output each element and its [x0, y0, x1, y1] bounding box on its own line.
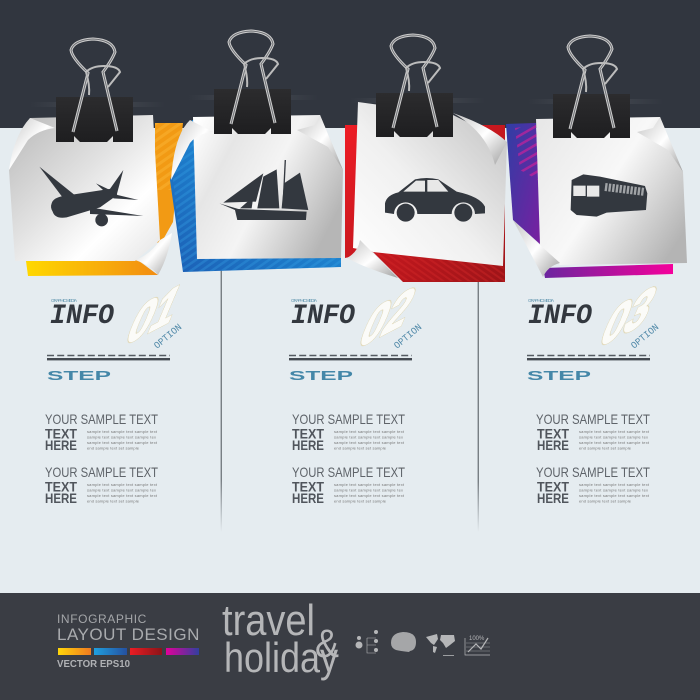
column 3 header — [527, 272, 665, 383]
column 2 text block A — [292, 411, 405, 453]
column 3 text block B: sample text sample text sample text — [579, 482, 650, 487]
column divider 2 — [478, 280, 479, 532]
OPTION label: OPTION — [152, 322, 184, 351]
note 4: train — [506, 117, 687, 278]
number 01: 01 — [118, 270, 191, 358]
column 1 text block B: YOUR SAMPLE TEXT — [45, 464, 158, 480]
orange backing sheet — [155, 123, 183, 245]
pink stripes — [515, 125, 538, 180]
footer: travel & holiday wordmark: & — [315, 622, 339, 666]
curled corner bottom-right — [135, 233, 172, 275]
column 2 text block A: HERE — [292, 437, 324, 453]
solid rule — [527, 358, 650, 360]
column 2 text block A: TEXT — [292, 426, 324, 442]
icon: sailing ship — [219, 160, 308, 220]
curled corner top-right — [637, 117, 683, 172]
colour swatches — [58, 648, 199, 655]
icon: hierarchy — [356, 630, 378, 653]
paper sheet 4 — [536, 117, 687, 265]
clip shadows on dark band — [30, 95, 663, 107]
icon: brain — [391, 632, 416, 652]
column 3 text block B: sample text sample text sample text — [579, 493, 650, 498]
orange stripes — [155, 123, 183, 190]
blue stripes — [172, 140, 341, 272]
column 2 text block A: end sample text set sample — [334, 446, 387, 450]
STEP label: STEP — [527, 368, 592, 383]
footer: layout design title — [57, 612, 200, 670]
icon: airplane — [39, 167, 143, 226]
icon: growth chart: 100% — [469, 636, 485, 642]
blue backing sheet — [170, 120, 341, 272]
magenta bottom strip — [543, 264, 673, 278]
column 3 text block B: TEXT — [537, 478, 569, 494]
vector label: VECTOR EPS10 — [57, 659, 130, 670]
curled corner top-right — [297, 115, 343, 170]
column 3 text block A — [536, 411, 650, 453]
dashed rule — [47, 354, 170, 356]
column 1 text block A — [45, 411, 158, 453]
column 3 text block B: end sample text set sample — [579, 498, 632, 504]
column 2 text block A: sample text sample text sample tex — [334, 434, 403, 440]
binder clip 4 — [553, 36, 630, 138]
column 1 text block A: sample text sample text sample text — [87, 429, 158, 434]
column 2 text block B — [292, 464, 405, 506]
column 3 text block A: sample text sample text sample text — [579, 440, 650, 445]
footer: travel & holiday wordmark — [222, 596, 339, 681]
column 1 header — [47, 270, 191, 383]
number 03: 03 — [592, 272, 665, 360]
icon: train — [571, 174, 647, 217]
STEP label: STEP — [289, 368, 354, 383]
red stripes — [373, 252, 505, 282]
note 1: airplane — [9, 115, 183, 276]
solid rule — [47, 358, 170, 360]
paper sheet 1 — [9, 115, 160, 261]
curled corner top-left — [171, 120, 213, 180]
top dark band — [0, 0, 700, 128]
small caption: GRAPHIC MEDIA — [291, 298, 317, 303]
footer: travel & holiday wordmark: holiday — [224, 634, 338, 681]
column 1 text block A: sample text sample text sample tex — [87, 434, 156, 440]
column 1 text block B — [45, 464, 158, 506]
column divider 1 — [221, 270, 222, 532]
column 1 text block A: YOUR SAMPLE TEXT — [45, 411, 158, 427]
curled corner top-right — [453, 113, 507, 165]
column 1 text block A: TEXT — [45, 426, 77, 442]
icon: growth chart — [465, 636, 490, 655]
binder clip 2 — [214, 31, 291, 134]
column 1 text block B: sample text sample text sample text — [87, 482, 158, 487]
column 3 text block B: YOUR SAMPLE TEXT — [536, 464, 650, 480]
small caption: GRAPHIC MEDIA — [528, 298, 554, 303]
INFO heading: INFO — [50, 301, 114, 332]
column 1 text block B: sample text sample text sample tex — [87, 488, 156, 492]
red backing sheet — [345, 125, 505, 282]
column 3 text block A: sample text sample text sample tex — [579, 434, 648, 440]
column 3 text block A: HERE — [537, 437, 569, 453]
column 2 header — [289, 273, 424, 383]
solid rule — [289, 358, 412, 360]
footer: layout design title: INFOGRAPHIC — [57, 612, 147, 626]
column 3 text block B — [536, 464, 650, 506]
column 1 text block A: sample text sample text sample text — [87, 440, 158, 445]
column 2 text block B: TEXT — [292, 478, 324, 494]
column 1 text block B: end sample text set sample — [87, 498, 140, 504]
column 3 text block B: sample text sample text sample tex — [579, 488, 648, 492]
column 2 text block B: sample text sample text sample text — [334, 493, 405, 498]
binder clip 1 — [56, 39, 133, 142]
curled corner bottom-left — [347, 240, 398, 278]
column 1 text block A: HERE — [45, 437, 77, 453]
footer: layout design title: LAYOUT DESIGN — [57, 625, 200, 644]
icon: world map — [426, 634, 455, 656]
column 2 text block B: sample text sample text sample text — [334, 482, 405, 487]
icon: car — [385, 178, 485, 222]
column 3 text block A: end sample text set sample — [579, 446, 632, 450]
column 1 text block B: sample text sample text sample text — [87, 493, 158, 498]
yellow bottom strip — [26, 258, 158, 276]
column 2 text block B: end sample text set sample — [334, 498, 387, 504]
dashed rule — [289, 354, 412, 356]
note 3: car — [345, 102, 507, 282]
INFO heading: INFO — [528, 301, 592, 332]
column 3 text block A: YOUR SAMPLE TEXT — [536, 411, 650, 427]
footer: travel & holiday wordmark: travel — [222, 596, 315, 645]
footer band — [0, 593, 700, 700]
paper sheet 3 — [353, 102, 507, 266]
paper sheet 2 — [193, 115, 343, 259]
column 1 text block B: TEXT — [45, 478, 77, 494]
column 2 text block B: YOUR SAMPLE TEXT — [292, 464, 405, 480]
column 2 text block B: HERE — [292, 490, 324, 506]
column 2 text block B: sample text sample text sample tex — [334, 488, 403, 492]
curled corner top-left — [9, 118, 55, 170]
OPTION label: OPTION — [392, 322, 424, 351]
INFO heading: INFO — [291, 301, 355, 332]
number 02: 02 — [351, 273, 424, 361]
column 1 text block B: HERE — [45, 490, 77, 506]
column 3 text block A: TEXT — [537, 426, 569, 442]
curled corner bottom-left — [513, 220, 560, 277]
column 3 text block A: sample text sample text sample text — [579, 429, 650, 434]
OPTION label: OPTION — [629, 322, 661, 351]
STEP label: STEP — [47, 368, 112, 383]
note 2: sailing ship — [170, 115, 343, 272]
binder clip 3 — [376, 35, 453, 137]
column 1 text block A: end sample text set sample — [87, 446, 140, 450]
dashed rule — [527, 354, 650, 356]
column 2 text block A: sample text sample text sample text — [334, 440, 405, 445]
column 3 text block B: HERE — [537, 490, 569, 506]
small caption: GRAPHIC MEDIA — [51, 298, 77, 303]
column 2 text block A: sample text sample text sample text — [334, 429, 405, 434]
column 2 text block A: YOUR SAMPLE TEXT — [292, 411, 405, 427]
purple backing sheet — [506, 123, 541, 245]
